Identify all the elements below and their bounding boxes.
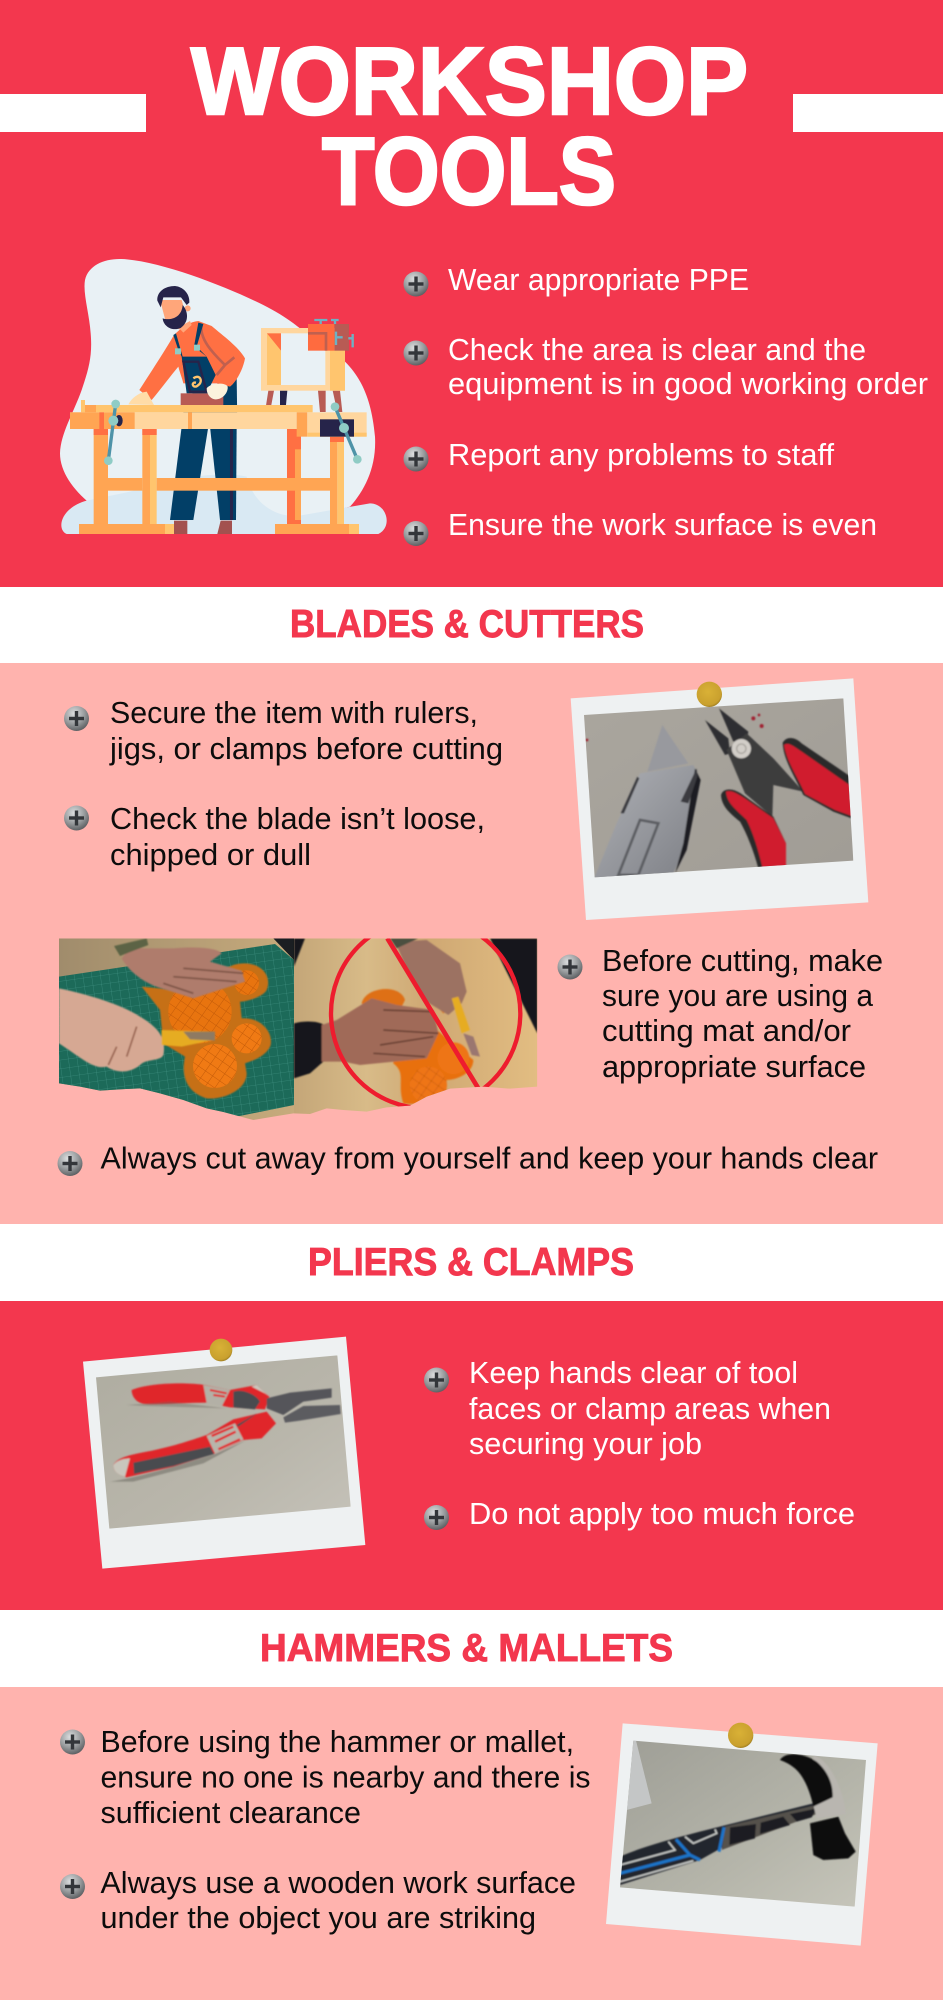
bullet: wooden surface: Always use a wooden work surface	[100, 1865, 576, 1900]
bullet: cutting mat: appropriate surface	[602, 1049, 866, 1084]
illustration: carpenter at workbench	[60, 259, 387, 534]
bullet: secure the item	[64, 695, 503, 766]
bullet: cutting mat	[558, 943, 883, 1084]
bullet: check the blade: Check the blade isn’t loose,	[110, 801, 485, 836]
polaroid photo: hammer	[606, 1723, 878, 1946]
bullet: keep hands clear: securing your job	[469, 1426, 702, 1461]
bullet: check the area: Check the area is clear and the	[448, 332, 866, 367]
heading: pliers and clamps	[0, 1224, 943, 1301]
bullet: keep hands clear	[424, 1355, 831, 1461]
bullet: wooden surface: under the object you are striking	[100, 1900, 536, 1935]
bullet: keep hands clear: faces or clamp areas when	[469, 1391, 831, 1426]
title	[0, 28, 943, 225]
heading: pliers and clamps: PLIERS & CLAMPS	[308, 1241, 634, 1284]
clamp frame	[261, 320, 353, 412]
bullet: check the area: equipment is in good working order	[448, 366, 928, 401]
heading: hammers and mallets	[0, 1610, 943, 1687]
title: WORKSHOP	[191, 28, 748, 135]
panel: blades and cutters	[0, 663, 943, 1224]
bullet: cutting mat: cutting mat and/or	[602, 1013, 851, 1048]
bullet: clearance: Before using the hammer or mallet,	[100, 1724, 574, 1759]
polaroid photo: pliers	[83, 1337, 365, 1569]
polaroid photo: utility knife and cutters	[571, 678, 868, 920]
panel: pliers and clamps	[0, 1301, 943, 1610]
bullet: wear PPE: Wear appropriate PPE	[448, 262, 749, 297]
pin	[210, 1339, 232, 1361]
bullet: secure the item: jigs, or clamps before cutting	[109, 731, 503, 766]
bullet: cutting mat: Before cutting, make	[602, 943, 883, 978]
panel: header and intro	[0, 0, 943, 587]
pin	[697, 682, 722, 707]
workbench	[70, 400, 367, 534]
title: TOOLS	[322, 118, 616, 225]
pin	[728, 1723, 753, 1748]
photo pair: cutting on a mat versus on a bare surface	[59, 938, 538, 1120]
bullet: check the blade	[64, 801, 485, 872]
bullet: wooden surface	[60, 1865, 576, 1935]
bullet: check the blade: chipped or dull	[110, 837, 311, 872]
bullet: keep hands clear: Keep hands clear of tool	[469, 1355, 798, 1390]
heading: hammers and mallets: HAMMERS & MALLETS	[260, 1627, 673, 1670]
bullet: cutting mat: sure you are using a	[602, 978, 874, 1013]
bullet: clearance	[60, 1724, 590, 1830]
bullet: force: Do not apply too much force	[469, 1496, 855, 1531]
bullet: cut away from yourself: Always cut away from yourself and keep your hands clear	[100, 1140, 878, 1176]
bullet: check the area	[404, 332, 928, 401]
panel: hammers and mallets	[0, 1687, 943, 2000]
bullet: even surface: Ensure the work surface is even	[448, 507, 877, 542]
bullet: secure the item: Secure the item with rulers,	[110, 695, 478, 730]
heading: blades and cutters	[0, 587, 943, 663]
heading: blades and cutters: BLADES & CUTTERS	[290, 603, 644, 646]
bullet: clearance: ensure no one is nearby and there is	[100, 1760, 590, 1794]
bullet: clearance: sufficient clearance	[100, 1795, 361, 1830]
worker	[128, 286, 245, 534]
bullet: report problems: Report any problems to staff	[448, 437, 834, 472]
